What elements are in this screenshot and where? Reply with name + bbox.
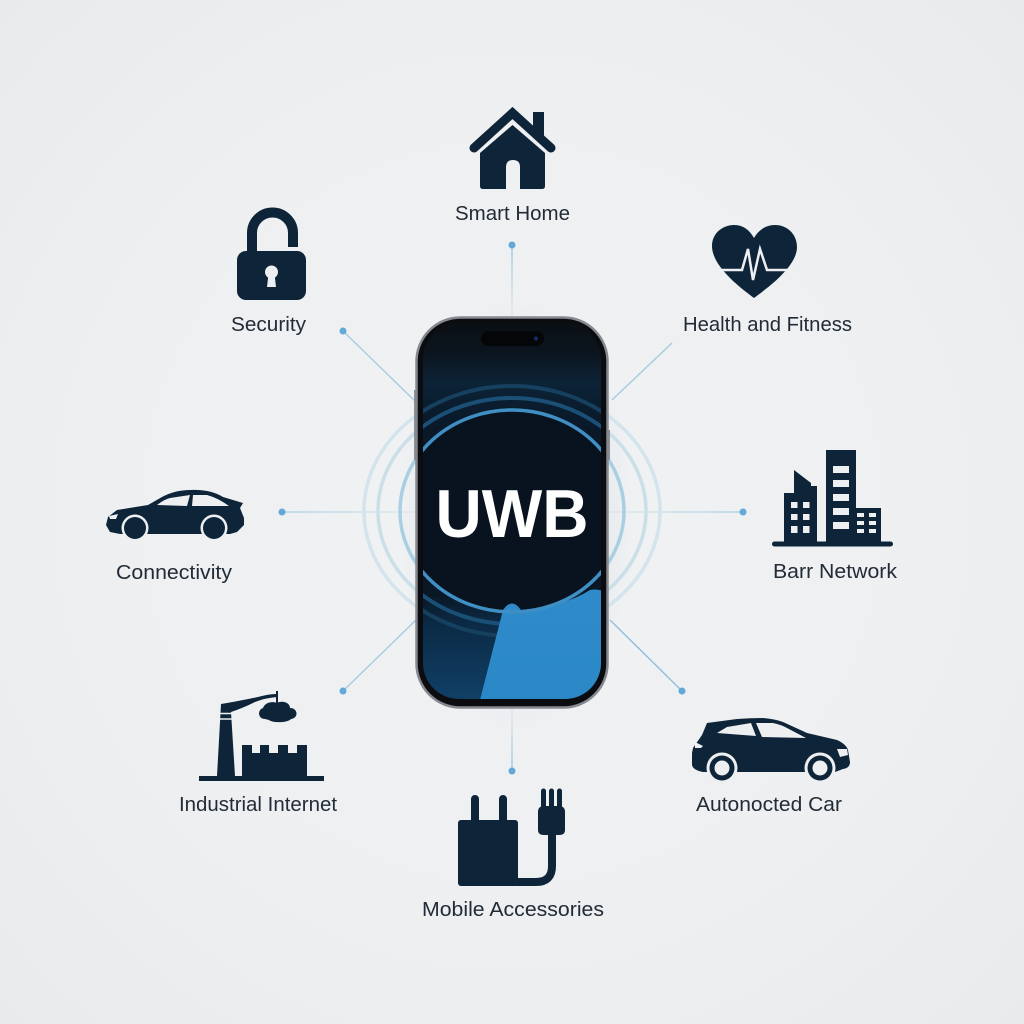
connector: accessories (508, 707, 516, 774)
label: Smart Home (455, 203, 570, 225)
phone frame (416, 318, 608, 708)
item: health (683, 225, 852, 336)
label: Mobile Accessories (422, 899, 604, 921)
icon: sedan (106, 490, 244, 542)
phone screen (423, 323, 601, 699)
label: Barr Network (773, 561, 898, 583)
connector: connectivity (278, 508, 416, 516)
icon: padlock (237, 212, 306, 300)
icon: hatchback (692, 718, 850, 784)
item: security (231, 212, 306, 336)
phone (414, 316, 610, 709)
item: network (772, 450, 898, 583)
connector: industrial (340, 620, 416, 694)
connector: health (612, 343, 672, 400)
signal rings outside phone (364, 386, 660, 636)
blue wave (480, 590, 610, 700)
icon: charger and cable (458, 788, 565, 886)
connector: smart home (508, 242, 516, 317)
phone shadow (398, 297, 634, 733)
item: connectivity (106, 490, 244, 584)
connector lines (278, 242, 746, 774)
connector: car (610, 620, 686, 694)
label: Security (231, 314, 306, 336)
item: accessories (422, 788, 604, 921)
item: industrial (179, 691, 337, 816)
connector: network (608, 508, 746, 516)
item: smart home (455, 112, 570, 225)
label: Industrial Internet (179, 794, 337, 816)
label: Autonocted Car (696, 794, 842, 816)
icon: house (474, 112, 551, 189)
dynamic island (481, 331, 544, 346)
item: car (692, 718, 850, 816)
side buttons (414, 390, 610, 460)
label: Connectivity (116, 562, 232, 584)
UWB title: UWB (436, 476, 588, 552)
label: Health and Fitness (683, 314, 852, 336)
connector: security (340, 328, 416, 402)
icon: buildings (772, 450, 893, 546)
camera (534, 336, 538, 340)
icon: factory (199, 691, 324, 781)
icon: heart (712, 225, 797, 298)
top glow and screen art (423, 384, 601, 699)
